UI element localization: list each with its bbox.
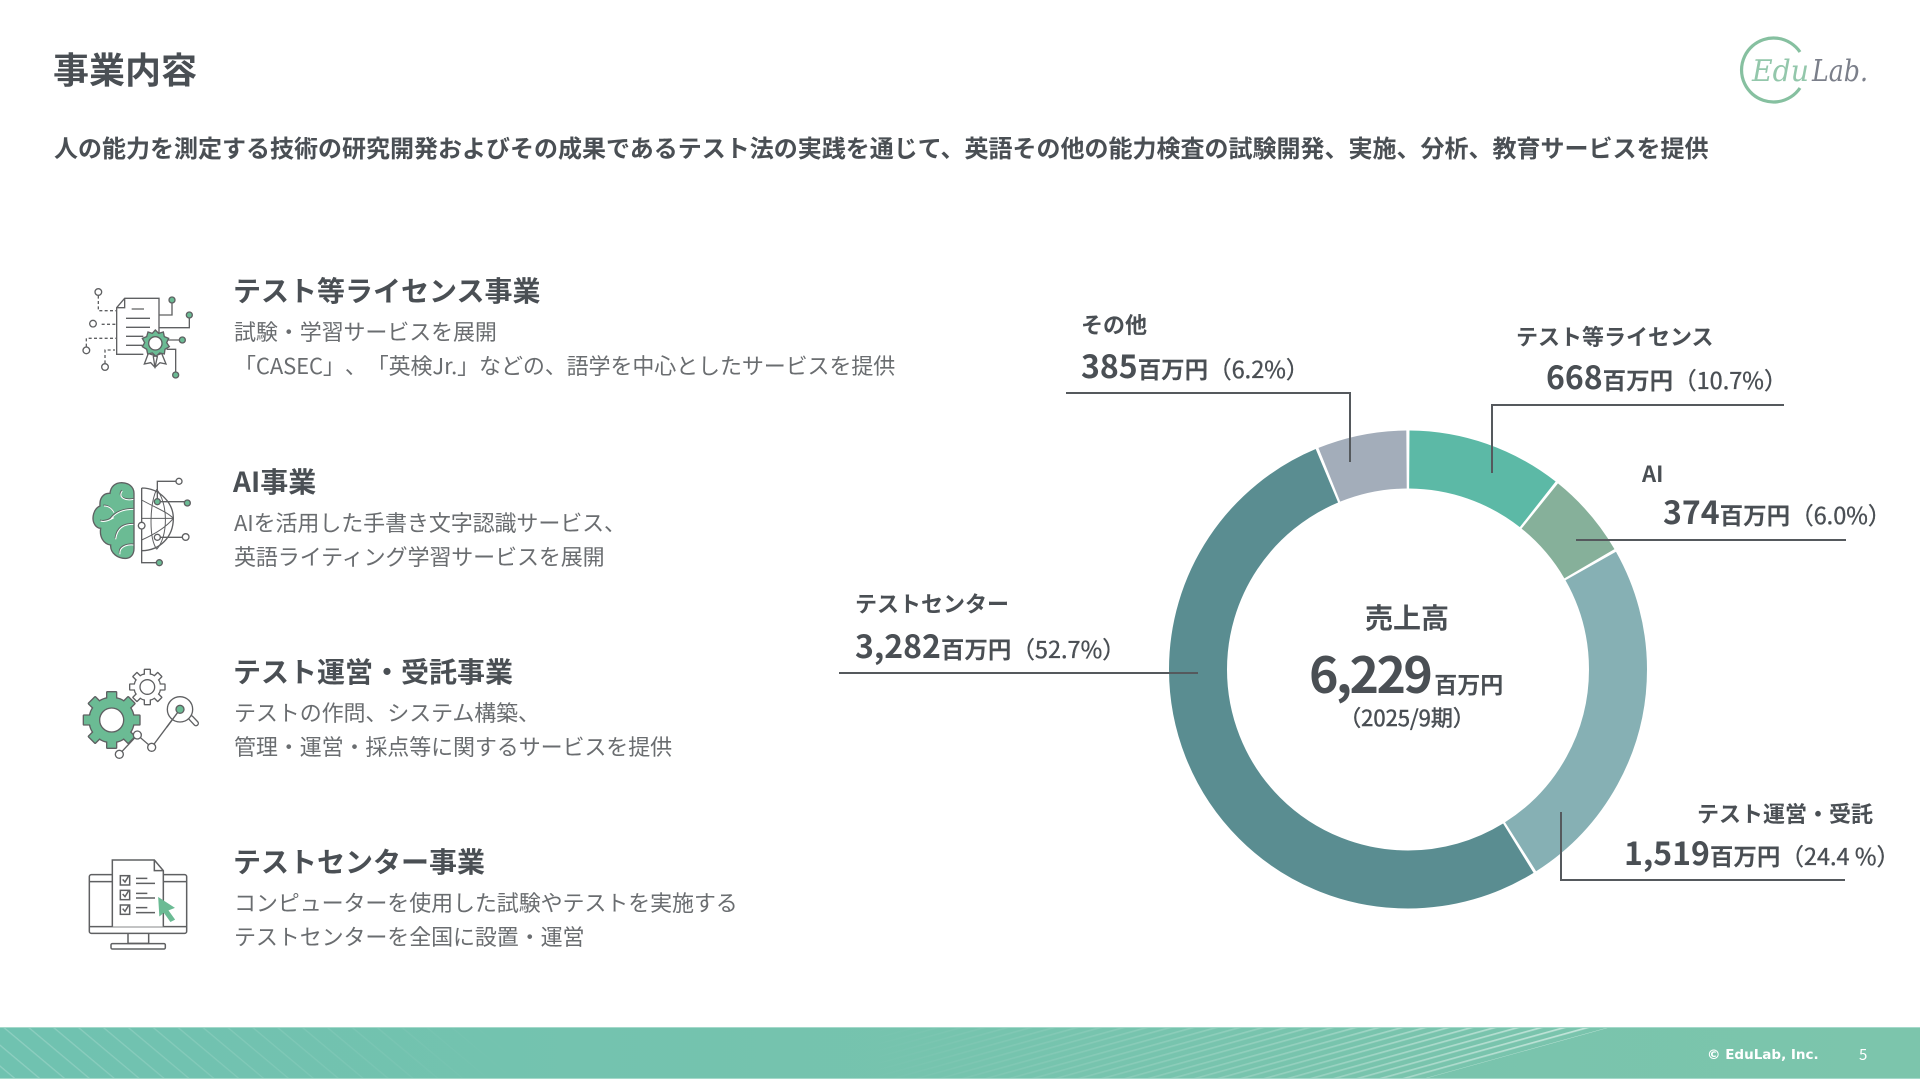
center label: sales: 売上高 [1365,597,1449,637]
label: test license: テスト等ライセンス [1516,320,1714,352]
text: AI description [234,506,626,572]
value: test operation: 1,519百万円（24.4 %） [1624,829,1900,875]
text: test operation description [234,696,672,762]
logo: Lab. [1811,54,1868,89]
label: AI: AI [1642,457,1663,489]
heading: test center business: テストセンター事業 [233,841,485,881]
title: 事業内容 [53,42,197,94]
center value: total sales: 6,229百万円 [1309,636,1503,708]
heading: AI business: AI事業 [233,461,316,501]
value: test license: 668百万円（10.7%） [1546,353,1787,399]
text: AI description: 英語ライティング学習サービスを展開 [234,540,605,572]
text: test license description: 「CASEC」、「英検Jr.」などの、語学を中心としたサービスを提供 [234,349,895,381]
value: test center: 3,282百万円（52.7%） [855,622,1126,668]
text: test license description: 試験・学習サービスを展開 [234,315,497,347]
label: test operation: テスト運営・受託 [1697,797,1873,829]
text: AI description: AIを活用した手書き文字認識サービス、 [234,506,626,538]
label: test center: テストセンター [855,587,1009,619]
page number: 5 [1859,1044,1867,1065]
icon: monitor with checklist [88,859,188,950]
text: test center description: コンピューターを使用した試験やテストを実施する [234,886,738,918]
icon: certificate document [82,288,193,379]
footer band [0,1027,1920,1079]
center period: （2025/9期） [1339,701,1475,733]
footer copyright: © EduLab, Inc. [1707,1047,1819,1063]
icon: brain and globe [92,478,191,566]
text: test center description [234,886,738,952]
text: test center description: テストセンターを全国に設置・運営 [234,920,584,952]
logo [1740,36,1868,104]
logo: Edu [1751,54,1809,89]
text: test license description [234,315,895,381]
heading: test license business: テスト等ライセンス事業 [233,270,540,310]
text: test operation description: テストの作問、システム構築、 [234,696,540,728]
heading: test operation business: テスト運営・受託事業 [233,651,513,691]
text: test operation description: 管理・運営・採点等に関するサービスを提供 [234,730,672,762]
label: others: その他 [1081,308,1147,340]
icon: gears and analysis chart [82,668,199,759]
value: others: 385百万円（6.2%） [1081,342,1309,388]
value: AI: 374百万円（6.0%） [1663,488,1891,534]
subtitle: 人の能力を測定する技術の研究開発およびその成果であるテスト法の実践を通じて、英語その他の能力検査の試験開発、実施、分析、教育サービスを提供 [54,129,1709,164]
